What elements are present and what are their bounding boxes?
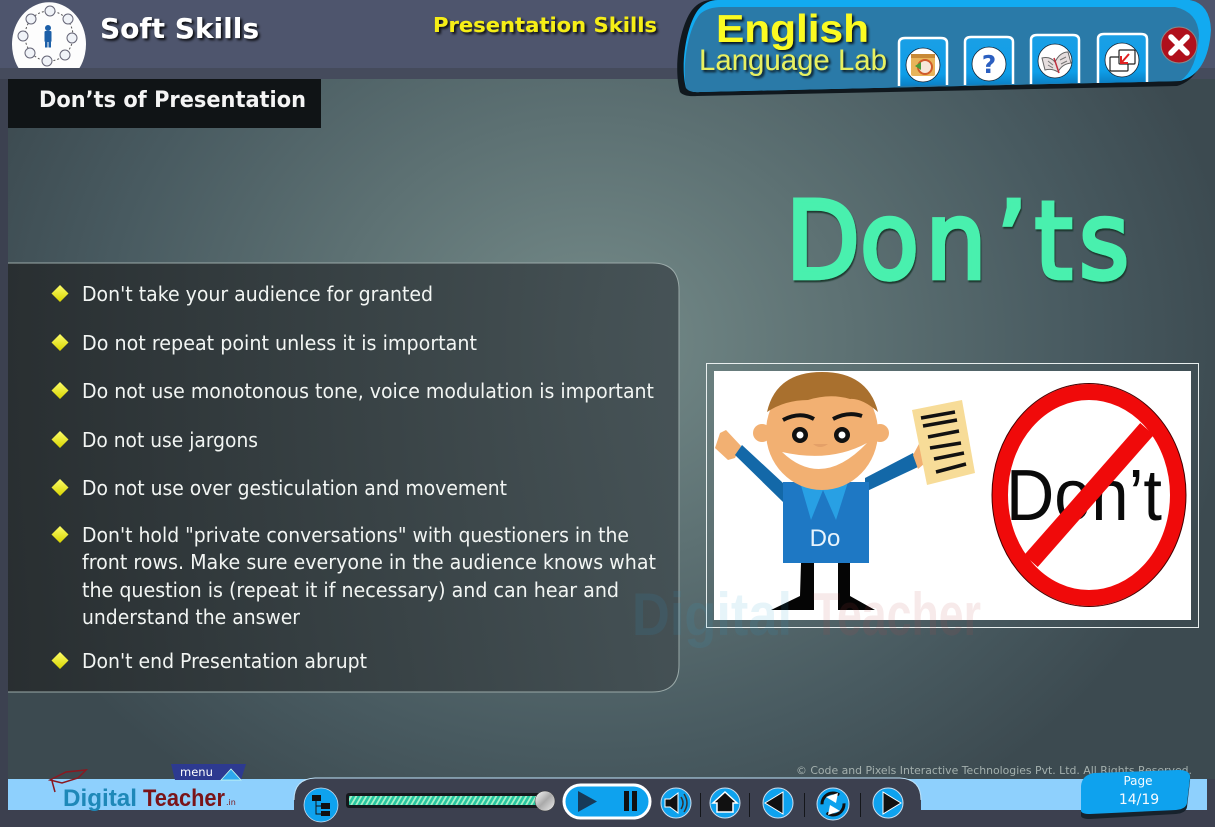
icon: book button xyxy=(1031,35,1079,84)
text: Language Lab: Language Lab xyxy=(699,44,887,77)
logo: Digital Teacher xyxy=(50,770,236,812)
panel: English Language Lab toolbar xyxy=(677,0,1211,96)
progress bar xyxy=(346,791,555,811)
text: English: English xyxy=(716,8,869,51)
icon: next xyxy=(873,788,903,818)
icon: close button xyxy=(1161,27,1197,63)
bullet 3: Do not use monotonous tone, voice modulation is important xyxy=(82,379,654,403)
panel: list of don'ts xyxy=(8,263,679,692)
bullet 6: Don't hold "private conversations" with questioners in the xyxy=(82,523,629,547)
big title: Don'ts: Don’ts xyxy=(786,180,1129,304)
top header bar xyxy=(0,0,1215,79)
watermark: Digital Teacher: Teacher xyxy=(813,581,981,648)
section heading: Don'ts of Presentation: Don’ts of Presentation xyxy=(39,88,306,113)
heading: Presentation Skills: Presentation Skills xyxy=(433,13,657,37)
icon: window button xyxy=(1098,34,1147,83)
icon: soft skills logo xyxy=(12,2,86,68)
cartoon figure: Do: Do xyxy=(810,525,840,552)
cartoon paper xyxy=(912,400,975,485)
page counter: Page xyxy=(1123,774,1153,788)
footer bar xyxy=(0,779,1215,827)
menu tab: menu xyxy=(180,765,213,779)
media control panel xyxy=(294,778,921,827)
bullet 5: Do not use over gesticulation and movement xyxy=(82,476,507,500)
icon: outline button xyxy=(304,788,338,822)
bullet 6: front rows. Make sure everyone in the audience knows what xyxy=(82,550,656,574)
heading: Soft Skills: Soft Skills xyxy=(100,12,259,45)
icon: help button xyxy=(965,37,1013,85)
bullet 4: Do not use jargons xyxy=(82,428,258,452)
section heading: Don'ts of Presentation xyxy=(8,79,321,128)
logo: Digital Teacher: Teacher xyxy=(143,785,225,812)
logo: Digital Teacher: Digital xyxy=(63,785,137,812)
bullet 2: Do not repeat point unless it is important xyxy=(82,331,477,355)
play and pause buttons xyxy=(564,785,650,818)
icon: home xyxy=(710,788,740,818)
icon: sound xyxy=(661,788,691,818)
bullet 7: Don't end Presentation abrupt xyxy=(82,649,367,673)
logo: Digital Teacher: .in xyxy=(226,798,236,807)
icon: previous xyxy=(763,788,793,818)
bullet 6: the question is (repeat it if necessary) and can hear and xyxy=(82,578,619,602)
watermark: Digital Teacher: Digital xyxy=(632,581,792,648)
icon: refresh xyxy=(817,788,849,820)
bullet 1: Don't take your audience for granted xyxy=(82,282,433,306)
prohibition sign: Don't xyxy=(992,384,1186,606)
bullet 6: understand the answer xyxy=(82,605,301,629)
icon: help button: ? xyxy=(982,50,996,79)
menu tab xyxy=(171,764,246,780)
illustration: Do and Don't picture xyxy=(706,364,1198,628)
cartoon legs xyxy=(771,563,875,610)
icon: history button xyxy=(899,38,947,86)
cartoon figure: Do xyxy=(715,372,924,563)
prohibition sign: Don't: Don’t xyxy=(1006,456,1162,536)
page counter: 14/19 xyxy=(1119,792,1159,808)
bullet 6 xyxy=(52,523,656,629)
watermark: Digital Teacher xyxy=(632,581,981,648)
copyright line: © Code and Pixels Interactive Technologies Pvt. Ltd. All Rights Reserved. xyxy=(796,765,1192,777)
page counter xyxy=(1081,770,1190,819)
